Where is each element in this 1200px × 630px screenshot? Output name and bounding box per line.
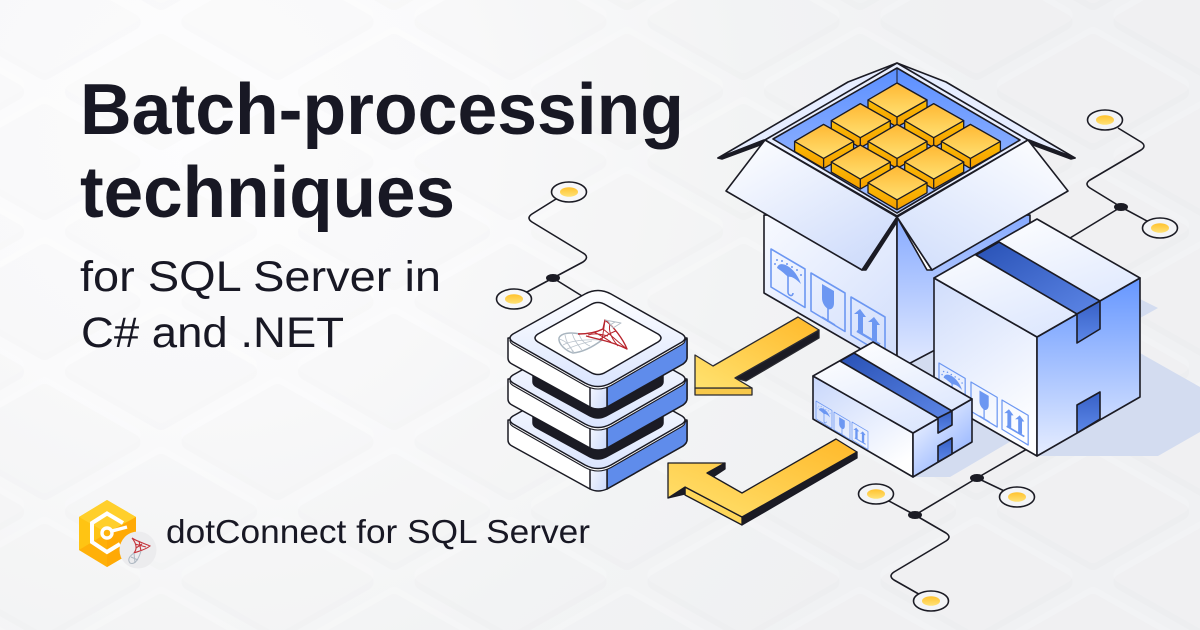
dark connector lower xyxy=(533,416,663,459)
server layer 2 xyxy=(508,332,687,450)
right front flap xyxy=(897,140,1068,270)
grid of yellow cubes xyxy=(795,83,1000,210)
small closed box xyxy=(813,342,972,477)
handling icons on small box xyxy=(816,401,868,449)
large box left face xyxy=(934,278,1037,456)
box shadows on floor xyxy=(905,299,1200,477)
box rim xyxy=(765,63,1028,216)
box body left face xyxy=(764,215,897,370)
server layer 1 xyxy=(508,290,687,409)
small box right face xyxy=(913,399,972,477)
subtitle xyxy=(80,253,441,357)
arrow: lower, pointing to server xyxy=(668,439,857,525)
tape on small box xyxy=(840,353,952,462)
interior back corner xyxy=(896,68,898,100)
large box top xyxy=(934,219,1140,337)
small box left face xyxy=(813,376,913,477)
arrow: upper, pointing to server xyxy=(695,317,819,395)
left front flap xyxy=(726,140,897,270)
dark connector upper xyxy=(533,375,663,418)
title xyxy=(80,70,684,233)
server layer 3 xyxy=(508,372,687,491)
back flaps xyxy=(718,63,1075,159)
subtitle: for SQL Server in xyxy=(80,253,441,301)
connector nodes xyxy=(496,110,1178,611)
box body right face xyxy=(897,215,1030,370)
title: techniques xyxy=(80,153,455,233)
large closed box xyxy=(934,219,1140,456)
handling icons on big box xyxy=(771,249,885,356)
title: Batch-processing xyxy=(80,70,684,150)
box interior xyxy=(773,68,1020,213)
subtitle: C# and .NET xyxy=(81,309,344,357)
server stack xyxy=(508,290,687,491)
icon: SQL Server logo xyxy=(559,320,627,353)
icon: dotConnect logo xyxy=(79,500,156,568)
tape on large box xyxy=(976,242,1100,433)
big open box xyxy=(718,63,1075,370)
connector lines xyxy=(514,128,1160,601)
handling icons on large box xyxy=(939,363,1028,445)
small box top xyxy=(813,342,972,433)
large box right face xyxy=(1037,278,1140,456)
product name: dotConnect for SQL Server xyxy=(166,513,590,550)
server top panel xyxy=(535,302,661,374)
